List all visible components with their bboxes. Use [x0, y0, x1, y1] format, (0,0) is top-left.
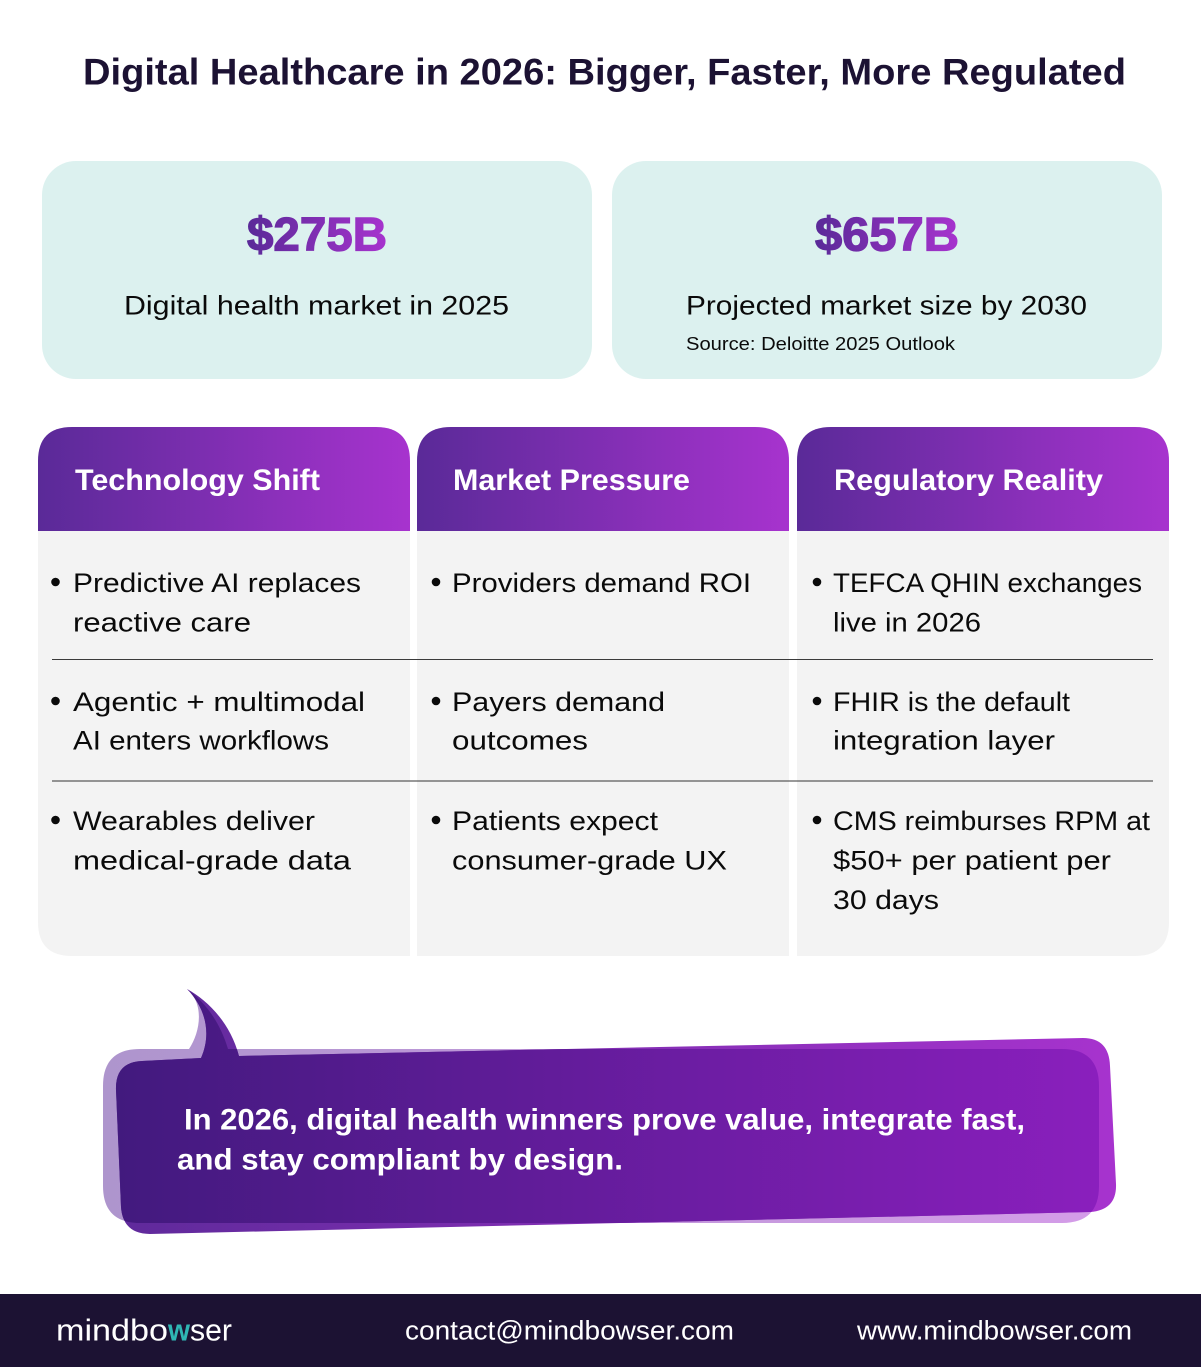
source note: Source: Deloitte 2025 Outlook: [686, 333, 956, 354]
bullet: predictive AI: reactive care: [73, 608, 251, 638]
panel: 2030 market stat: [612, 161, 1162, 379]
title: Digital Healthcare in 2026: Bigger, Faster, More Regulated: [83, 52, 1126, 92]
stat value: $275B: $275B: [247, 208, 387, 260]
bullet: predictive AI: Predictive AI replaces: [73, 568, 361, 598]
column header: Market Pressure: Market Pressure: [453, 464, 690, 497]
column header: Regulatory Reality: [797, 427, 1169, 531]
bullet: TEFCA: TEFCA QHIN exchanges: [833, 568, 1142, 598]
bullet: CMS: CMS reimburses RPM at: [833, 806, 1151, 836]
logo: mindbowser: ser: [190, 1312, 232, 1348]
callout text: [177, 1104, 1025, 1176]
bullet: payers: outcomes: [452, 726, 588, 756]
panel: Regulatory Reality column: [797, 427, 1169, 956]
bullet: FHIR: FHIR is the default: [833, 687, 1071, 717]
logo: mindbowser: mindbo: [56, 1312, 168, 1348]
bullet: CMS: 30 days: [833, 885, 939, 915]
column header: Regulatory Reality: Regulatory Reality: [834, 464, 1103, 497]
bullet: patients: consumer-grade UX: [452, 846, 727, 876]
bullet: FHIR: [813, 687, 1071, 756]
bullet: predictive AI: [51, 568, 361, 638]
column header: Technology Shift: [38, 427, 410, 531]
bullet: wearables: medical-grade data: [73, 846, 352, 876]
callout text: and stay compliant by design.: [177, 1144, 623, 1176]
callout: speech bubble: [103, 989, 1116, 1234]
stat label: 2030: Projected market size by 2030: [686, 290, 1087, 320]
bullet: wearables: Wearables deliver: [73, 806, 315, 836]
bullet: payers: Payers demand: [452, 687, 665, 717]
contact email: contact@mindbowser.com: [405, 1316, 734, 1346]
bullet: TEFCA: [813, 568, 1142, 638]
bullet: agentic AI: Agentic + multimodal: [73, 687, 365, 717]
stat label: 2025: Digital health market in 2025: [124, 290, 509, 320]
bullet: patients: [432, 806, 727, 876]
callout text: In 2026, digital health winners prove value, integrate fast,: [184, 1104, 1025, 1136]
bullet: agentic AI: [51, 687, 365, 756]
bullet: wearables: [51, 806, 352, 876]
column header: Technology Shift: Technology Shift: [75, 464, 320, 497]
bullet: patients: Patients expect: [452, 806, 659, 836]
footer bar: [0, 1294, 1201, 1367]
column header: Market Pressure: [417, 427, 789, 531]
panel: Technology Shift column: [38, 427, 410, 956]
panel: Market Pressure column: [417, 427, 789, 956]
bullet: agentic AI: AI enters workflows: [73, 726, 329, 756]
stat value: $657B: $657B: [815, 208, 959, 260]
bullet: CMS: [813, 806, 1151, 915]
bullet: payers: [432, 687, 665, 756]
website: www.mindbowser.com: [856, 1316, 1132, 1346]
bullet: CMS: $50+ per patient per: [833, 846, 1111, 876]
bullet: FHIR: integration layer: [833, 726, 1055, 756]
logo: mindbowser: w: [167, 1312, 191, 1348]
bullet: TEFCA: live in 2026: [833, 608, 981, 638]
logo: mindbowser: [56, 1312, 232, 1348]
panel: 2025 market stat: [42, 161, 592, 379]
bullet: providers: Providers demand ROI: [452, 568, 751, 598]
